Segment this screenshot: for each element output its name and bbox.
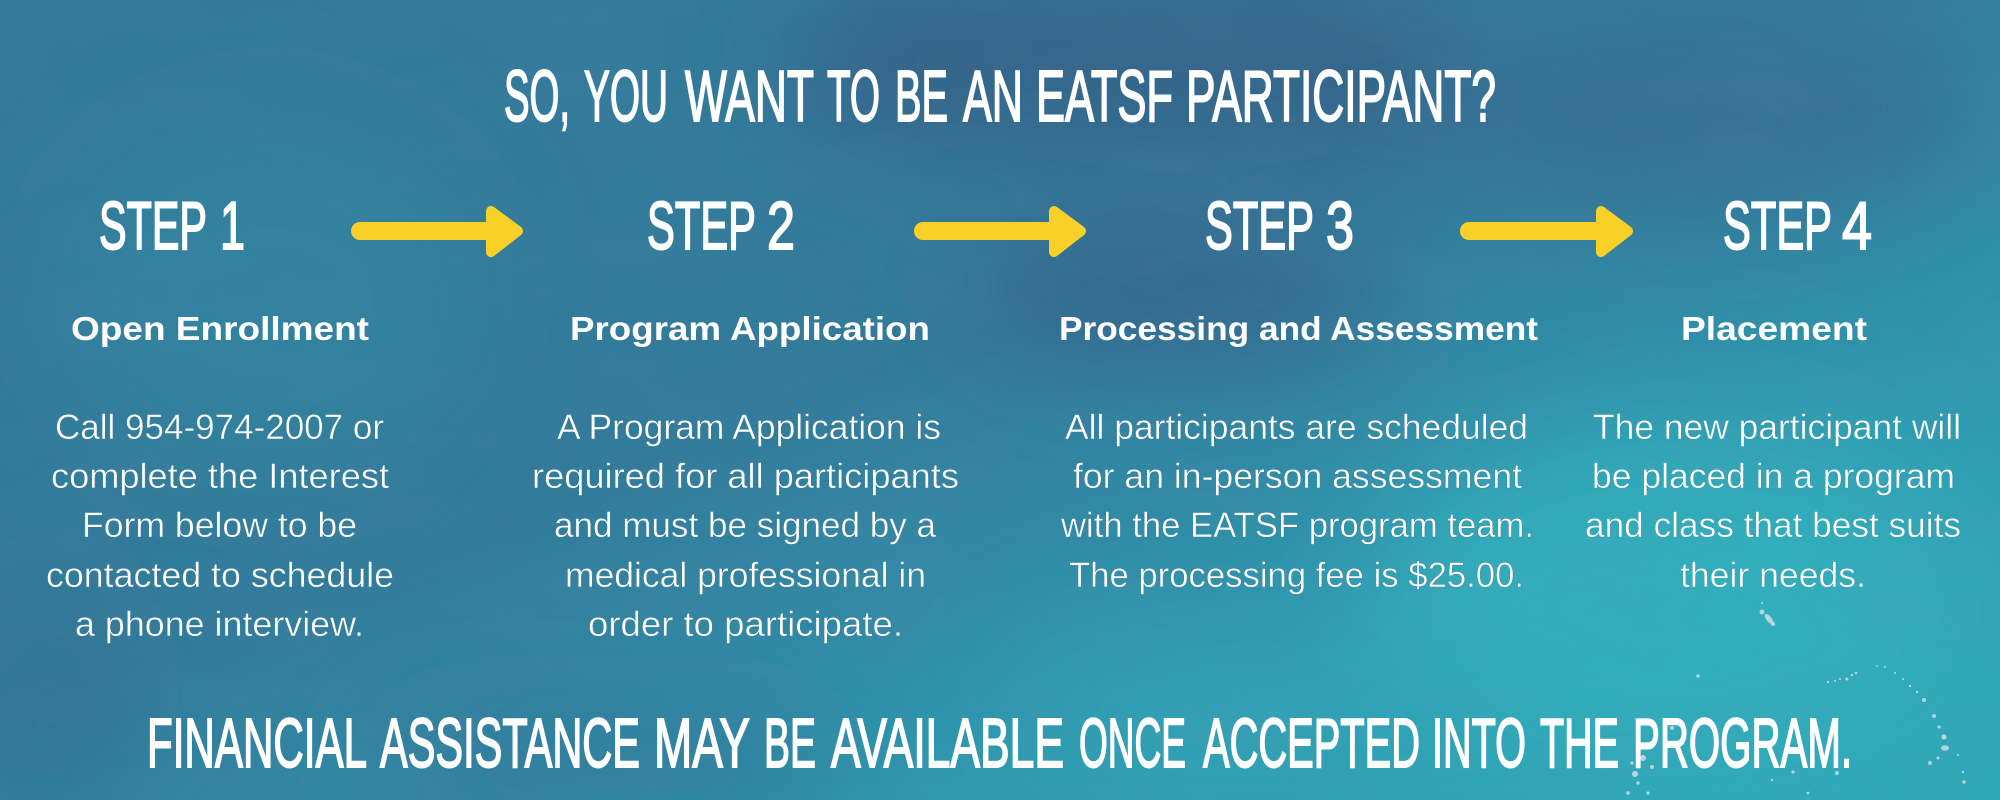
title: EATSF	[1036, 57, 1173, 137]
title: WANT	[685, 57, 814, 137]
arrow: step 3 to step 4	[1460, 211, 1628, 252]
title: YOU	[584, 57, 668, 137]
closing statement: THE	[1540, 704, 1619, 782]
step 2 description: required for all participants	[532, 457, 959, 496]
step 2 subheading: Program Application	[570, 310, 930, 347]
step 3 description: The processing fee is $25.00.	[1069, 556, 1524, 595]
step 4 description: and class that best suits	[1585, 506, 1961, 545]
step 1 description: a phone interview.	[75, 605, 364, 644]
title: TO	[827, 57, 880, 137]
step 2 heading: 2	[767, 188, 795, 264]
closing statement: MAY	[654, 704, 750, 782]
title	[504, 57, 1496, 137]
step 4 description: be placed in a program	[1592, 457, 1955, 496]
closing statement: INTO	[1432, 704, 1526, 782]
step 2 heading: STEP	[647, 188, 756, 264]
step 1 description	[46, 408, 394, 644]
step 3 description	[1060, 408, 1534, 595]
closing statement: BE	[764, 704, 816, 782]
title: AN	[963, 57, 1023, 137]
step 3 subheading: Processing and Assessment	[1059, 310, 1538, 347]
arrow: step 2 to step 3	[914, 211, 1081, 252]
step 1 subheading: Open Enrollment	[71, 310, 369, 347]
step 1 heading: 1	[220, 188, 245, 264]
closing statement: AVAILABLE	[831, 704, 1064, 782]
step 3 description: All participants are scheduled	[1065, 408, 1528, 447]
closing statement: ACCEPTED	[1203, 704, 1420, 782]
title: BE	[895, 57, 948, 137]
step 4 description: their needs.	[1680, 556, 1866, 595]
arrow: step 1 to step 2	[351, 211, 518, 252]
step 2 description: A Program Application is	[557, 408, 941, 447]
step 4 heading: STEP	[1723, 188, 1832, 264]
step 3 heading: 3	[1326, 188, 1354, 264]
step 2 description	[532, 408, 959, 644]
step 4 heading: 4	[1842, 188, 1872, 264]
closing statement: FINANCIAL	[147, 704, 367, 782]
step 4 description	[1585, 408, 1961, 595]
step 1 heading: STEP	[99, 188, 207, 264]
closing statement: ASSISTANCE	[380, 704, 640, 782]
step 2 description: order to participate.	[588, 605, 903, 644]
step 4 description: The new participant will	[1593, 408, 1961, 447]
step 1 description: Form below to be	[82, 506, 357, 545]
step 1 description: Call 954-974-2007 or	[55, 408, 384, 447]
step 2 description: and must be signed by a	[554, 506, 937, 545]
closing statement	[147, 704, 1852, 782]
step 3 description: for an in-person assessment	[1073, 457, 1522, 496]
step 3 description: with the EATSF program team.	[1060, 506, 1534, 545]
speckles: foam near bottom right	[1626, 602, 1966, 795]
step 3 heading: STEP	[1205, 188, 1314, 264]
step 1 description: complete the Interest	[51, 457, 389, 496]
step 2 description: medical professional in	[565, 556, 926, 595]
step 4 subheading: Placement	[1681, 310, 1867, 347]
title: PARTICIPANT?	[1186, 57, 1496, 137]
closing statement: ONCE	[1079, 704, 1186, 782]
step 1 description: contacted to schedule	[46, 556, 394, 595]
title: SO,	[504, 57, 570, 137]
